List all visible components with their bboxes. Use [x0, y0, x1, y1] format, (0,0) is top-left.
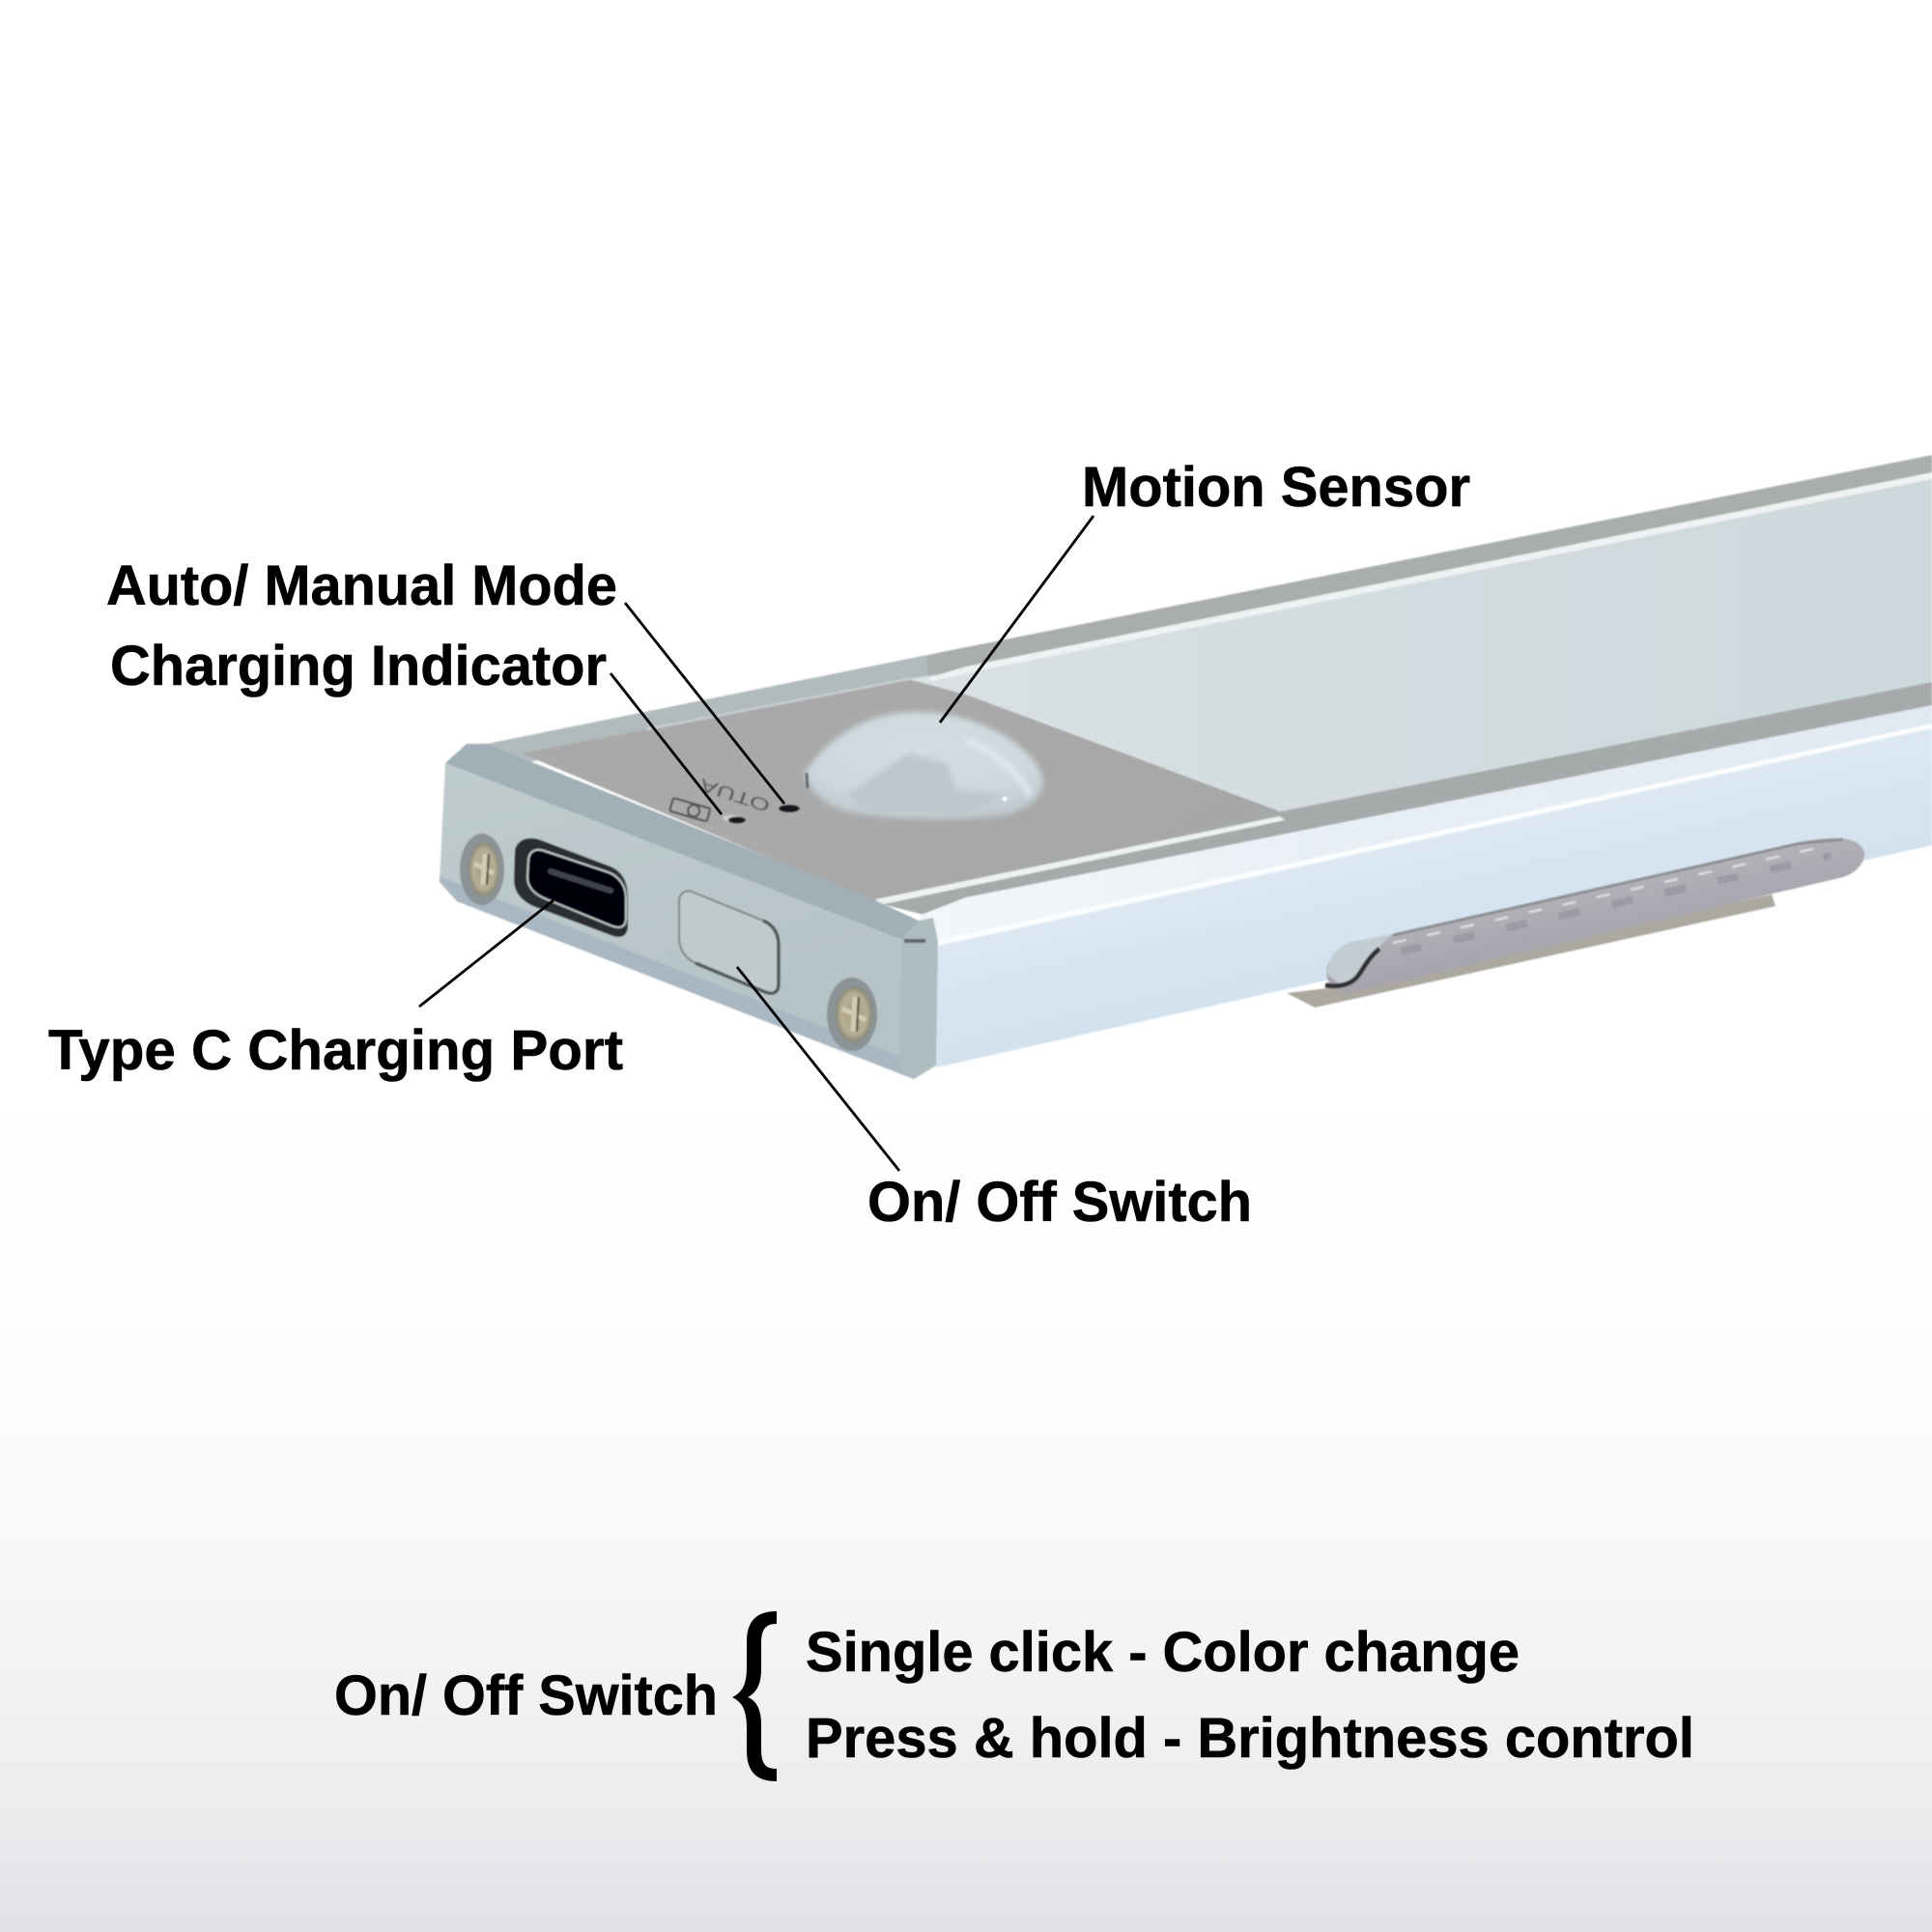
top rail left tint — [467, 655, 927, 763]
dome lens facets — [847, 753, 1005, 814]
plate highlight — [875, 816, 1285, 905]
label: motion sensor: Motion Sensor — [1082, 456, 1470, 519]
dome glint — [1003, 796, 1007, 802]
end cap lower edge — [440, 876, 914, 1079]
sensor plate — [522, 679, 1280, 902]
auto mode dot — [779, 805, 800, 812]
right screw — [827, 978, 877, 1051]
adhesive tape — [1287, 895, 1776, 1008]
left screw — [460, 834, 504, 905]
corner notch — [904, 939, 925, 943]
clip top band — [1393, 839, 1843, 935]
AUTO marking: AUTO — [697, 775, 773, 815]
charging indicator dot — [723, 815, 746, 823]
clip dimples — [1401, 856, 1831, 952]
end cap top strip — [445, 744, 919, 940]
leader line: auto/manual mode — [625, 603, 784, 804]
mounting clip — [1326, 838, 1864, 993]
faint plate upper highlight — [646, 678, 913, 729]
leader line: type C port — [419, 900, 554, 1007]
lower rail — [875, 682, 1932, 916]
corner strip — [898, 918, 938, 1079]
leader line: on/off switch — [737, 967, 899, 1171]
label: charging indicator: Charging Indicator — [110, 635, 607, 697]
top rail highlight — [927, 472, 1932, 681]
end cap front face — [440, 763, 914, 1079]
motion sensor dome — [805, 712, 1043, 819]
on/off button — [679, 891, 779, 993]
dome highlight arc — [966, 741, 1031, 795]
legend: on/off switch heading: On/ Off Switch — [334, 1664, 718, 1727]
button shadow edge — [696, 921, 779, 993]
top rail — [467, 455, 1932, 763]
side upper band — [919, 705, 1932, 943]
leader line: charging indicator — [611, 673, 722, 814]
legend: press and hold: Press & hold - Brightness control — [806, 1707, 1694, 1770]
legend brace — [732, 1611, 777, 1781]
side highlight line — [938, 724, 1932, 946]
leader line: motion sensor — [940, 516, 1094, 723]
label: on/off switch: On/ Off Switch — [867, 1171, 1252, 1234]
charging symbol — [669, 798, 710, 821]
side face — [936, 724, 1932, 1067]
label: type C charging port: Type C Charging Port — [48, 1019, 623, 1082]
label: auto/manual mode: Auto/ Manual Mode — [106, 554, 617, 617]
legend: single click: Single click - Color change — [806, 1621, 1520, 1684]
Type C port — [514, 838, 628, 937]
diffuser panel — [908, 477, 1932, 811]
product: LED light bar — [440, 455, 1932, 1079]
dome left edge — [807, 773, 808, 788]
clip curl — [1325, 934, 1393, 987]
clip bead detail — [1393, 848, 1816, 943]
